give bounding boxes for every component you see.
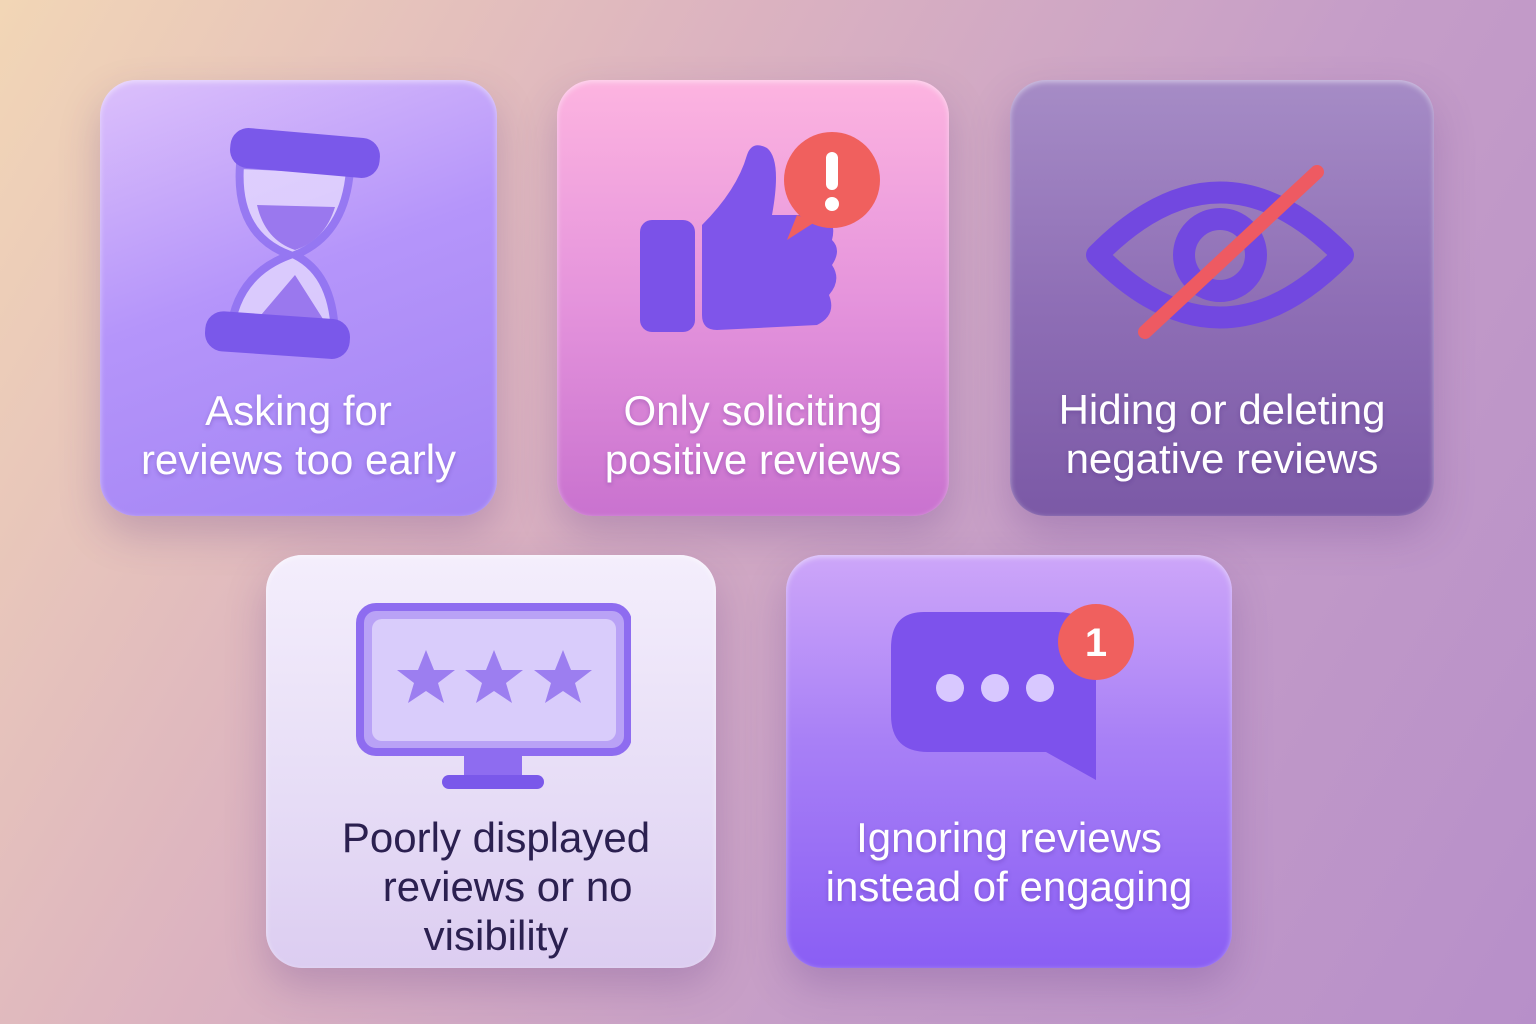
label: Poorly displayed	[342, 814, 650, 861]
icon: hourglass	[205, 128, 380, 359]
label	[826, 814, 1192, 913]
card 3: hiding negative	[1010, 80, 1434, 516]
card 2: only positive	[557, 80, 949, 516]
label: reviews too early	[141, 436, 456, 483]
label: Only soliciting	[623, 387, 883, 434]
label: instead of engaging	[826, 863, 1192, 910]
label	[1059, 386, 1385, 483]
label: Hiding or deleting	[1059, 386, 1385, 433]
icon: thumbs up with alert	[640, 132, 880, 332]
label: Asking for	[205, 387, 392, 434]
label: reviews or no	[383, 863, 633, 910]
card 5: ignoring reviews	[786, 555, 1232, 968]
icon: chat bubble with badge: 1	[1085, 621, 1107, 665]
icon: crossed eye	[1086, 165, 1354, 339]
label: positive reviews	[605, 436, 901, 483]
label: Ignoring reviews	[856, 814, 1162, 861]
label	[141, 387, 456, 486]
label: visibility	[424, 912, 568, 959]
label	[605, 387, 901, 486]
card 4: poorly displayed	[266, 555, 716, 968]
label	[342, 814, 650, 959]
label: negative reviews	[1066, 435, 1378, 482]
icon: monitor with stars	[356, 603, 631, 789]
card 1: asking too early	[100, 80, 497, 516]
icon: chat bubble with badge	[891, 604, 1134, 780]
